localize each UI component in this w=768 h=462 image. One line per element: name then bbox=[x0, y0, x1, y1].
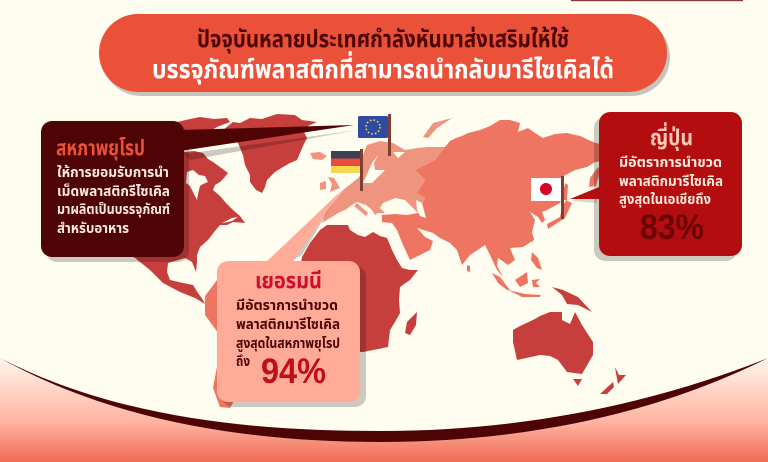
iceland bbox=[310, 152, 327, 160]
panel: Germany bbox=[217, 190, 366, 407]
world map bbox=[100, 114, 626, 408]
Japan heading: ญี่ปุ่น bbox=[650, 122, 693, 151]
EU text: เม็ดพลาสติกรีไซเคิล bbox=[57, 183, 170, 199]
title banner bbox=[99, 14, 670, 96]
africa bbox=[300, 225, 418, 352]
EU heading: สหภาพยุโรป bbox=[56, 137, 145, 161]
flag: EU bbox=[358, 114, 391, 156]
greenland bbox=[223, 114, 317, 193]
flag: Japan bbox=[531, 176, 564, 219]
Germany value: 94% bbox=[261, 352, 326, 391]
Japan value: 83% bbox=[640, 208, 704, 247]
Japan text: สูงสุดในเอเชียถึง bbox=[619, 191, 711, 209]
flag: Germany bbox=[331, 149, 363, 191]
south america bbox=[205, 280, 250, 408]
panel: EU bbox=[41, 121, 358, 262]
north america bbox=[100, 117, 245, 304]
title line 2: บรรจุภัณฑ์พลาสติกที่สามารถนำกลับมารีไซเคิลได้ bbox=[152, 51, 614, 85]
EU text bbox=[57, 164, 170, 236]
panel: Japan bbox=[570, 112, 742, 261]
EU text: สำหรับอาหาร bbox=[57, 220, 129, 236]
Germany text bbox=[236, 297, 340, 369]
Japan text: มีอัตราการนำขวด bbox=[619, 154, 722, 170]
Japan text bbox=[619, 154, 723, 209]
EU text: มาผลิตเป็นบรรจุภัณฑ์ bbox=[57, 201, 170, 218]
Germany text: สูงสุดในสหภาพยุโรป bbox=[236, 335, 340, 353]
asia bbox=[382, 120, 620, 297]
title line 1: ปัจจุบันหลายประเทศกำลังหันมาส่งเสริมให้ใช้ bbox=[197, 25, 569, 54]
Japan text: พลาสติกมารีไซเคิล bbox=[619, 173, 723, 189]
bottom curved floor bbox=[0, 358, 768, 462]
madagascar bbox=[405, 312, 417, 335]
Germany text: มีอัตราการนำขวด bbox=[236, 297, 338, 313]
oceania bbox=[513, 287, 626, 394]
europe bbox=[320, 118, 452, 223]
Germany text: พลาสติกมารีไซเคิล bbox=[236, 316, 340, 332]
Germany heading: เยอรมนี bbox=[255, 268, 322, 293]
EU text: ให้การยอมรับการนำ bbox=[57, 164, 169, 180]
Germany text: ถึง bbox=[236, 353, 250, 369]
